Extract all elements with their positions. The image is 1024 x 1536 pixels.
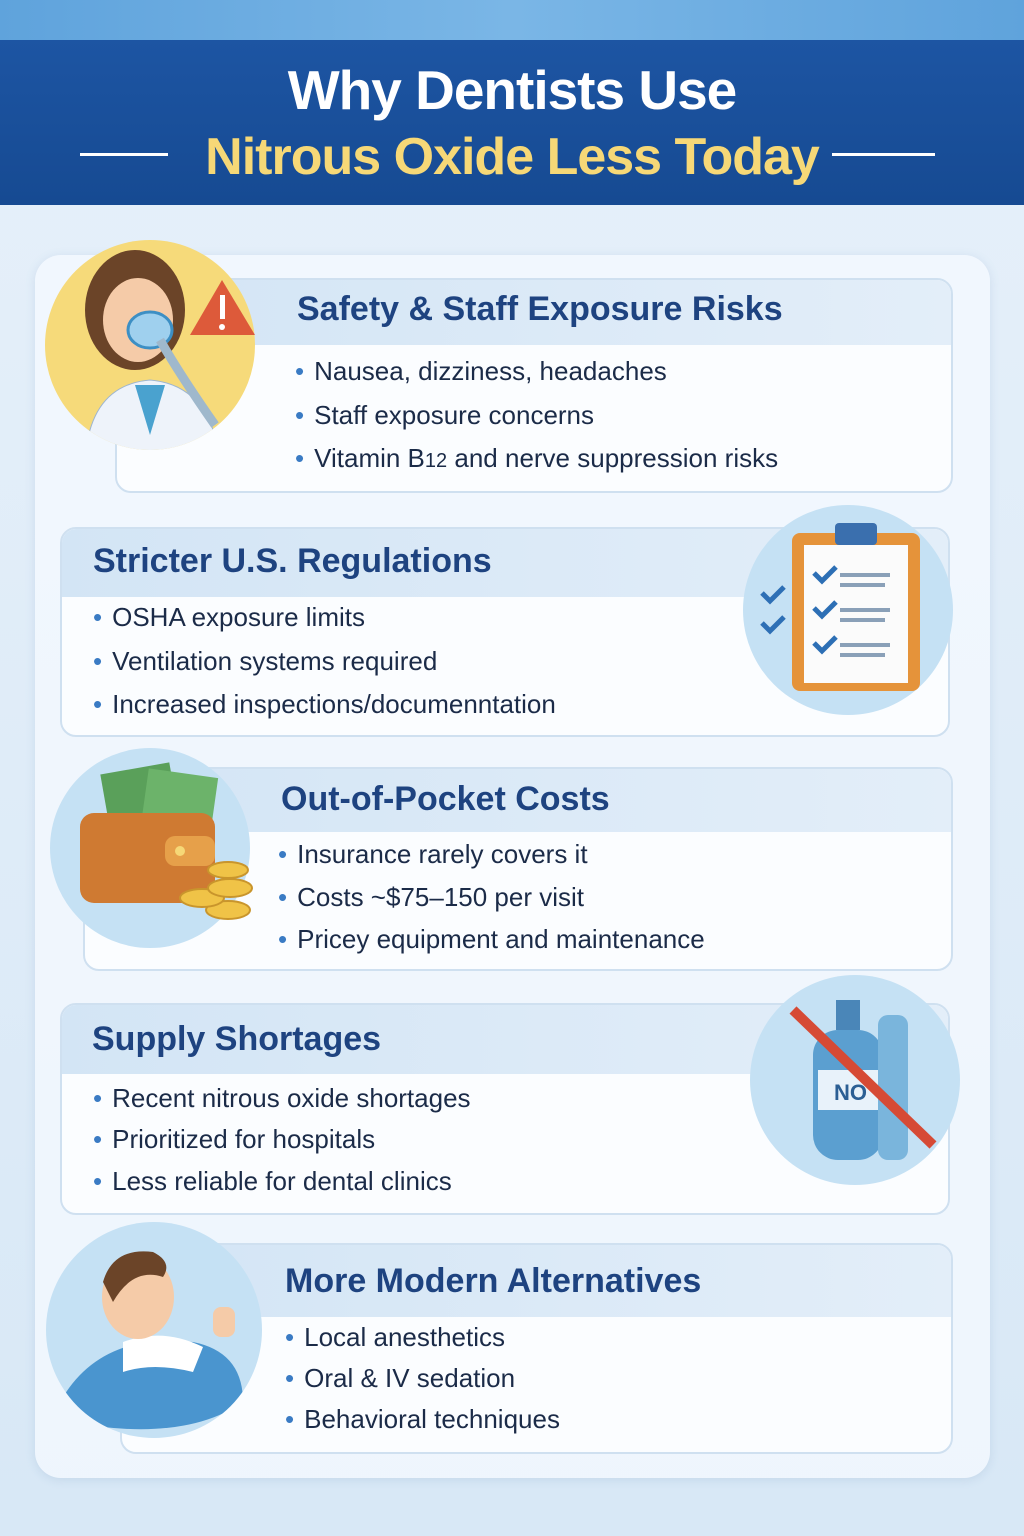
panel: alternatives bbox=[120, 1243, 953, 1454]
bullets: safety bbox=[296, 356, 778, 473]
heading: regulations: Stricter U.S. Regulations bbox=[93, 542, 492, 580]
text: Nausea, dizziness, headaches bbox=[314, 356, 667, 386]
panel: safety bbox=[115, 278, 953, 493]
text: Less reliable for dental clinics bbox=[112, 1166, 452, 1196]
text: Local anesthetics bbox=[304, 1322, 505, 1352]
title bbox=[80, 59, 935, 186]
text: Ventilation systems required bbox=[112, 646, 437, 676]
heading: supply: Supply Shortages bbox=[92, 1020, 381, 1058]
text: Staff exposure concerns bbox=[314, 400, 594, 430]
text: OSHA exposure limits bbox=[112, 602, 365, 632]
icon: wallet bbox=[50, 748, 253, 948]
text: Oral & IV sedation bbox=[304, 1363, 515, 1393]
heading: alternatives: More Modern Alternatives bbox=[285, 1262, 701, 1300]
bullets: costs bbox=[279, 839, 705, 954]
text: Vitamin B12 and nerve suppression risks bbox=[314, 443, 778, 473]
text: Insurance rarely covers it bbox=[297, 839, 588, 869]
panel: regulations bbox=[60, 527, 950, 737]
text: Pricey equipment and maintenance bbox=[297, 924, 705, 954]
text: Costs ~$75–150 per visit bbox=[297, 882, 584, 912]
bullets: alternatives bbox=[286, 1322, 560, 1434]
panel: costs bbox=[83, 767, 953, 971]
text: Behavioral techniques bbox=[304, 1404, 560, 1434]
bullets: regulations bbox=[94, 602, 556, 719]
icon: masked dentist bbox=[45, 240, 255, 450]
text: Recent nitrous oxide shortages bbox=[112, 1083, 471, 1113]
bullets: supply bbox=[94, 1083, 471, 1196]
text: Increased inspections/documenntation bbox=[112, 689, 556, 719]
text: Prioritized for hospitals bbox=[112, 1124, 375, 1154]
icon: crossed gas tank: NO bbox=[834, 1080, 867, 1105]
heading: safety: Safety & Staff Exposure Risks bbox=[297, 290, 783, 328]
icon: crossed gas tank bbox=[750, 975, 960, 1185]
panel: supply bbox=[60, 1003, 950, 1215]
text: Why Dentists Use bbox=[288, 59, 736, 121]
text: Nitrous Oxide Less Today bbox=[205, 128, 819, 186]
icon: clipboard bbox=[743, 505, 953, 715]
icon: relaxed patient bbox=[46, 1222, 262, 1438]
title bar bbox=[0, 40, 1024, 205]
heading: costs: Out-of-Pocket Costs bbox=[281, 780, 610, 818]
